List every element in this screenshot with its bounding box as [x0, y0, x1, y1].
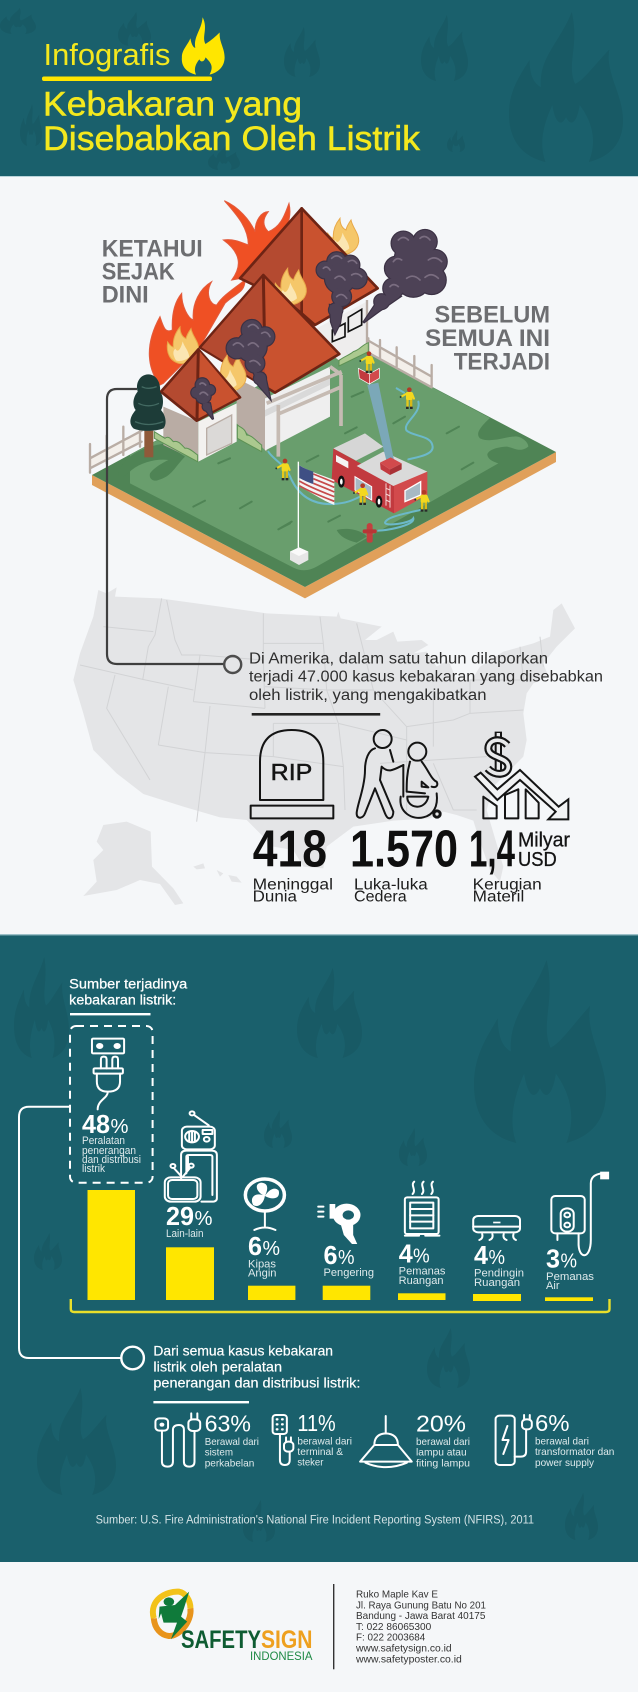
- back roof: [240, 208, 378, 325]
- icon: plug: [92, 1039, 124, 1109]
- smoke plumes: [191, 230, 447, 419]
- item: 6% transformer: [496, 1410, 615, 1469]
- chart heading: kebakaran listrik:: [69, 992, 176, 1007]
- text: Ketahui sejak dini: [102, 236, 203, 309]
- bar: 4% heater: [398, 1293, 446, 1300]
- stat: 29%: %: [194, 1208, 213, 1230]
- stat: material loss: USD: [518, 849, 557, 871]
- stat: 4% air conditioner: [474, 1240, 524, 1289]
- logo: Safety Sign Indonesia: [153, 1592, 312, 1663]
- stat: 4% heater: 4: [399, 1238, 413, 1268]
- item: 63% cabling: sistem: [205, 1446, 233, 1458]
- chart bracket: [71, 1299, 610, 1312]
- connector node: [121, 1347, 144, 1369]
- text: Sebelum semua ini terjadi: SEBELUM: [434, 302, 550, 329]
- dashed highlight box: [70, 1026, 153, 1183]
- bar: 29%: [166, 1247, 214, 1300]
- icon: tombstone RIP: RIP: [271, 759, 312, 785]
- heading underline: [42, 76, 212, 81]
- stat: injured: 1.570: [350, 821, 458, 879]
- text: statistics intro: [249, 650, 603, 704]
- stat: 29%: Lain-lain: [166, 1228, 204, 1240]
- stat: 4% heater: Ruangan: [399, 1275, 444, 1287]
- item: 6% transformer: power supply: [535, 1457, 595, 1469]
- stat: 48%: 48: [82, 1109, 110, 1139]
- contact address: [355, 1588, 486, 1665]
- icon: dollar and falling chart: [475, 732, 568, 819]
- text: Sebelum semua ini terjadi: SEMUA INI: [425, 325, 550, 352]
- text: breakdown intro: Dari semua kasus kebakaran: [153, 1343, 333, 1359]
- stat: 3% water heater: Pemanas: [546, 1271, 595, 1283]
- scene details drawn on house grid: [90, 201, 447, 481]
- stat: injured: Luka-luka: [354, 876, 428, 893]
- contact address: www.safetysign.co.id: [355, 1643, 452, 1655]
- right fence: [368, 338, 432, 387]
- stat: 4% heater: Pemanas: [399, 1265, 446, 1277]
- item: 6% transformer: berawal dari: [535, 1435, 589, 1447]
- stat: 6% dryer: 6: [324, 1240, 338, 1270]
- stat: 4% air conditioner: Pendingin: [474, 1268, 524, 1280]
- text: breakdown intro: [153, 1343, 360, 1391]
- text: Sebelum semua ini terjadi: TERJADI: [454, 348, 550, 375]
- stat: 4% air conditioner: %: [488, 1247, 505, 1269]
- item: 63% cabling: perkabelan: [205, 1458, 254, 1470]
- water hoses: [268, 388, 433, 531]
- stat: injured: [350, 821, 458, 906]
- stat: material loss: Kerugian: [473, 876, 542, 893]
- heading: Infografis: Infografis: [44, 37, 170, 72]
- item: 20% lamp: 20%: [416, 1411, 466, 1437]
- item: 20% lamp: lampu atau: [416, 1446, 467, 1458]
- stat: 48%: listrik: [82, 1163, 105, 1175]
- contact address: Bandung - Jawa Barat 40175: [356, 1610, 486, 1622]
- text: Ketahui sejak dini: KETAHUI: [102, 236, 203, 263]
- item: 20% lamp: berawal dari: [416, 1436, 470, 1448]
- logo: Safety Sign Indonesia: SAFETY: [181, 1626, 261, 1654]
- connector line from tree to text: [107, 389, 224, 664]
- text: breakdown intro: penerangan dan distribusi listrik:: [153, 1375, 360, 1391]
- bar: 6% fan: [248, 1286, 295, 1300]
- text: Ketahui sejak dini: DINI: [102, 282, 149, 309]
- stat: material loss: Milyar: [518, 830, 570, 852]
- logo: Safety Sign Indonesia: SIGN: [261, 1626, 312, 1654]
- header banner: [0, 0, 638, 177]
- connector line from highlighted bar: [19, 1107, 121, 1358]
- text: statistics intro: terjadi 47.000 kasus kebakaran yang disebabkan: [249, 668, 603, 686]
- text: statistics intro: oleh listrik, yang mengakibatkan: [249, 687, 486, 704]
- item: 20% lamp: fiting lampu: [416, 1458, 470, 1470]
- text: statistics intro: Di Amerika, dalam satu tahun dilaporkan: [249, 650, 548, 668]
- stat: 4% air conditioner: Ruangan: [474, 1277, 520, 1289]
- stat: injured: Cedera: [354, 889, 407, 906]
- stat: 29%: 29: [166, 1201, 194, 1231]
- tree: [130, 374, 166, 457]
- stat: material loss: 1,4: [469, 821, 515, 879]
- stat: material loss: Materil: [473, 889, 524, 906]
- item: 11% terminal: [273, 1410, 352, 1469]
- contact address: T: 022 86065300: [356, 1621, 431, 1633]
- connector node: [224, 656, 241, 673]
- stat: 29%: [166, 1201, 213, 1240]
- contact address: www.safetyposter.co.id: [355, 1653, 462, 1665]
- contact address: Ruko Maple Kav E: [356, 1588, 438, 1600]
- contact address: Jl. Raya Gunung Batu No 201: [356, 1599, 486, 1611]
- stat: 4% heater: [399, 1238, 446, 1287]
- chart heading: Sumber terjadinya: [69, 976, 188, 991]
- item: 11% terminal: 11%: [297, 1410, 336, 1436]
- small wing: [154, 343, 368, 462]
- item: 20% lamp: [360, 1411, 470, 1470]
- title: Disebabkan Oleh Listrik: [43, 120, 421, 158]
- fire truck and crew: [275, 351, 429, 565]
- stat: 6% dryer: Pengering: [324, 1267, 374, 1279]
- map of United States: [73, 587, 575, 905]
- title: Kebakaran yang: [43, 86, 302, 124]
- bar: 4% air conditioner: [473, 1294, 521, 1301]
- text: breakdown intro: listrik oleh peralatan: [153, 1359, 282, 1375]
- icon: water heater: [551, 1172, 609, 1255]
- front roof: [200, 275, 339, 393]
- text: Ketahui sejak dini: SEJAK: [102, 258, 175, 285]
- red flames: [223, 201, 302, 280]
- item: 63% cabling: 63%: [205, 1411, 251, 1437]
- title: [43, 86, 421, 158]
- hydrant: [363, 523, 377, 543]
- item: 11% terminal: berawal dari: [297, 1435, 352, 1447]
- stat: 6% dryer: %: [338, 1247, 355, 1269]
- stat: 48%: [82, 1109, 141, 1175]
- icon: room heater: [405, 1182, 439, 1236]
- contact address: F: 022 2003684: [356, 1632, 425, 1644]
- stat: 48%: %: [110, 1116, 129, 1138]
- text: Sebelum semua ini terjadi: [425, 302, 550, 375]
- item: 11% terminal: steker: [297, 1457, 324, 1469]
- icon: tombstone RIP: [251, 730, 333, 818]
- stat: 48%: Peralatan: [82, 1135, 125, 1147]
- ground platform: [92, 340, 556, 598]
- bar: 48%: [88, 1190, 135, 1300]
- footer: [153, 1584, 486, 1669]
- stat: 4% air conditioner: 4: [474, 1240, 489, 1270]
- stat: 6% dryer: [324, 1240, 374, 1279]
- left fence: [90, 427, 142, 473]
- stat: 48%: dan distribusi: [82, 1154, 141, 1166]
- item: 63% cabling: Berawal dari: [205, 1436, 259, 1448]
- icon: air conditioner: [473, 1216, 520, 1240]
- source note: Sumber: U.S. Fire Administration's National Fire Incident Reporting System (NFIRS), 2011: [96, 1514, 534, 1526]
- firefighters: [359, 351, 374, 373]
- icon: yellow flame: [182, 17, 225, 75]
- icon: person and wheelchair: [357, 730, 442, 819]
- stat: 3% water heater: Air: [546, 1280, 560, 1292]
- stat: deaths: Meninggal: [253, 876, 333, 893]
- American flag: [290, 462, 334, 565]
- bar: 6% dryer: [323, 1286, 370, 1300]
- stat: deaths: 418: [253, 821, 327, 879]
- stat: deaths: [253, 821, 333, 906]
- chart heading: [69, 976, 188, 1007]
- bar: 3% water heater: [545, 1297, 593, 1301]
- item: 6% transformer: transformator dan: [535, 1446, 615, 1458]
- stat: 48%: penerangan: [82, 1145, 136, 1157]
- illustration: burning house scene: [90, 201, 556, 598]
- stat: material loss: [469, 821, 570, 906]
- logo: Safety Sign Indonesia: INDONESIA: [250, 1649, 312, 1663]
- icon: appliances: [165, 1111, 217, 1202]
- stat: 3% water heater: %: [560, 1251, 577, 1273]
- stat: 6% fan: 6: [248, 1231, 262, 1261]
- item: 11% terminal: terminal &: [297, 1446, 343, 1458]
- item: 63% cabling: [155, 1411, 259, 1470]
- stat: 6% fan: %: [262, 1238, 280, 1260]
- stat: 3% water heater: [546, 1244, 595, 1292]
- stat: deaths: Dunia: [253, 889, 297, 906]
- panel: sources of electrical fire: [0, 934, 638, 1562]
- icon: hair dryer: [318, 1204, 361, 1244]
- stat: 6% fan: [248, 1231, 280, 1280]
- stat: 3% water heater: 3: [546, 1244, 560, 1274]
- stat: 4% heater: %: [413, 1245, 430, 1267]
- main wing walls and porch: [237, 367, 342, 457]
- tree shadow: [118, 443, 185, 481]
- back wall with windows: [315, 300, 367, 360]
- stat: 6% fan: Angin: [248, 1268, 276, 1280]
- icon: fan: [245, 1179, 284, 1230]
- item: 6% transformer: 6%: [535, 1410, 570, 1436]
- stat: 6% fan: Kipas: [248, 1259, 276, 1271]
